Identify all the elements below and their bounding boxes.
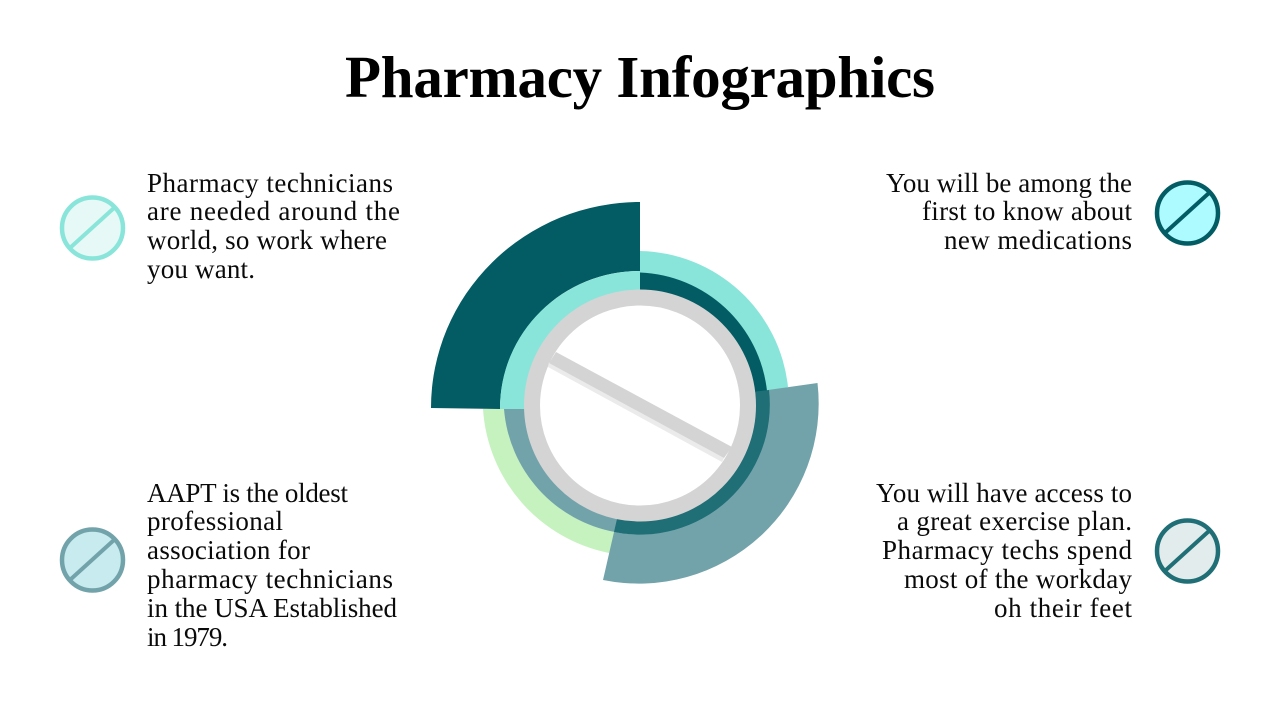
text: bottom left: [147, 478, 398, 652]
text: bottom right: a great exercise plan.: [897, 506, 1132, 536]
text: top left: [147, 168, 400, 284]
mid teal large sector: [603, 383, 819, 584]
text: bottom right: [876, 478, 1132, 623]
text: bottom left: AAPT is the oldest: [147, 478, 348, 508]
title: Pharmacy Infographics: [345, 44, 935, 110]
text: bottom right: oh their feet: [994, 593, 1132, 623]
text: top left: you want.: [147, 254, 255, 284]
text: top right: You will be among the: [886, 168, 1132, 198]
text: bottom right: You will have access to: [876, 478, 1132, 508]
icon: bottom right pill: [1157, 520, 1218, 582]
block: bottom left: [62, 478, 398, 652]
dark teal inner arc: [640, 272, 767, 400]
pill shadow line: [548, 362, 724, 462]
text: top left: world, so work where: [147, 225, 387, 255]
text: top right: [886, 168, 1132, 255]
text: top left: Pharmacy technicians: [147, 168, 393, 198]
block: top left: [62, 168, 400, 284]
darker teal inner band: [614, 390, 770, 535]
text: bottom right: most of the workday: [904, 564, 1132, 594]
mid teal inner band: [504, 409, 640, 532]
icon: top left pill: [62, 198, 123, 258]
block: top right: [886, 168, 1218, 255]
text: bottom left: in the USA Established: [147, 593, 398, 623]
pill ring: [532, 298, 748, 514]
icon: bottom left pill: [62, 530, 123, 590]
text: bottom left: in 1979.: [147, 622, 228, 652]
text: bottom left: association for: [147, 535, 310, 565]
chart: circular pill diagram: [431, 202, 819, 584]
text: bottom right: Pharmacy techs spend: [882, 535, 1132, 565]
light teal outer arc: [640, 251, 788, 400]
dark teal large sector: [431, 202, 640, 409]
text: top left: are needed around the: [147, 196, 400, 226]
text: bottom left: professional: [147, 506, 283, 536]
light teal inner band: [500, 271, 640, 409]
green outer arc: [483, 409, 640, 553]
text: bottom left: pharmacy technicians: [147, 564, 393, 594]
text: top right: first to know about: [922, 196, 1132, 226]
icon: top right pill: [1157, 182, 1218, 244]
block: bottom right: [876, 478, 1218, 623]
text: top right: new medications: [944, 225, 1132, 255]
pill score line: [549, 352, 732, 458]
